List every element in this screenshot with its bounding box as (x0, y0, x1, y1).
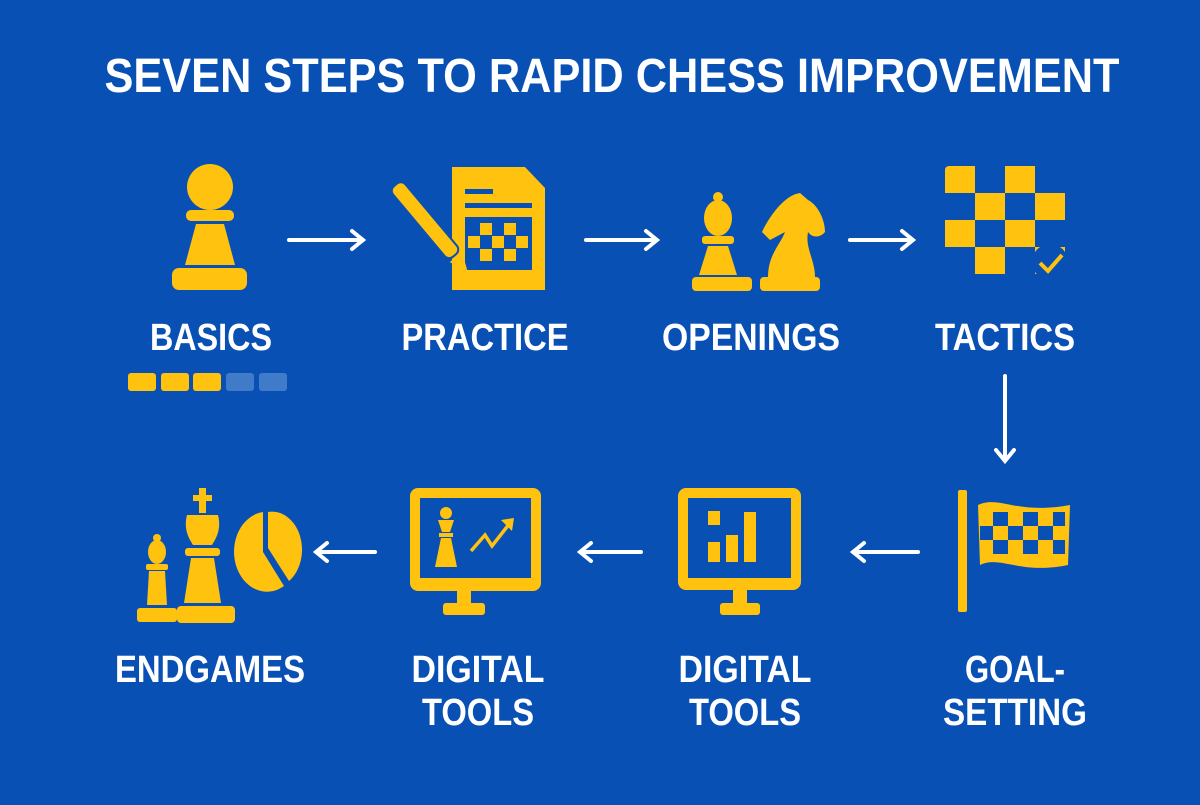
icon: monitor king trend (410, 488, 541, 615)
label: digital tools (right) (678, 649, 812, 734)
label: digital tools (left): TOOLS (422, 692, 534, 734)
label: digital tools (left): DIGITAL (412, 649, 544, 691)
label: goal-setting (943, 649, 1087, 734)
icon: endgame pieces (137, 488, 302, 623)
progress bar (128, 373, 287, 391)
arrow 5 (853, 543, 918, 561)
title: SEVEN STEPS TO RAPID CHESS IMPROVEMENT (104, 50, 1120, 103)
arrow 3 (850, 231, 913, 249)
arrow 1 (289, 231, 363, 249)
label: digital tools (left) (412, 649, 544, 734)
icon: goal flag (958, 490, 1070, 612)
arrow down (996, 376, 1014, 461)
label: goal-setting: SETTING (943, 692, 1087, 734)
label: openings: OPENINGS (662, 317, 840, 359)
label: basics: BASICS (150, 317, 272, 359)
label: goal-setting: GOAL- (965, 649, 1065, 691)
label: endgames: ENDGAMES (115, 649, 305, 691)
arrow 7 (316, 543, 375, 561)
label: tactics: TACTICS (935, 317, 1075, 359)
label: digital tools (right): DIGITAL (678, 649, 812, 691)
icon: practice document (389, 167, 545, 290)
icon: pawn (172, 164, 247, 290)
arrow 2 (586, 231, 657, 249)
arrow 6 (580, 543, 641, 561)
icon: bishop and knight (692, 192, 825, 291)
icon: tactics board (945, 166, 1068, 280)
label: digital tools (right): TOOLS (689, 692, 801, 734)
icon: monitor bar chart (678, 488, 801, 615)
label: practice: PRACTICE (402, 317, 568, 359)
